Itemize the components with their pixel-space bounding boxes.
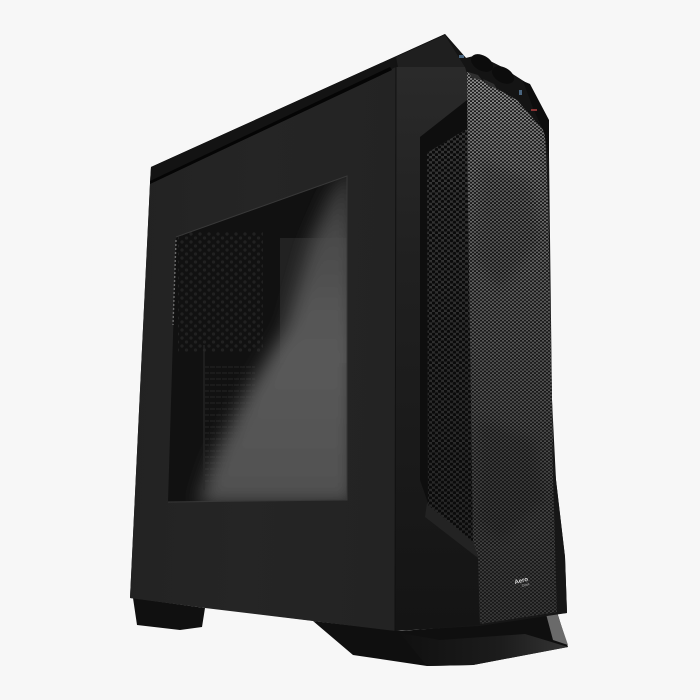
front mesh, shaded section	[427, 127, 473, 542]
window frame lines	[168, 176, 347, 502]
front panel corner trim	[523, 81, 549, 160]
front left strip	[395, 67, 480, 631]
product image: PC tower case	[130, 34, 568, 666]
brand logo: Cool	[521, 582, 530, 588]
interior panel through reflection	[280, 238, 350, 363]
side panel	[130, 67, 396, 631]
interior lighter panel	[280, 238, 307, 328]
rear foot	[133, 598, 205, 630]
top panel	[150, 34, 465, 183]
dark fan shapes behind mesh	[475, 160, 545, 540]
lower chevron	[425, 503, 478, 558]
control knob	[489, 63, 517, 87]
front mesh, main section	[467, 72, 557, 624]
control knob	[468, 51, 496, 75]
blue port	[459, 55, 464, 58]
interior perforation	[178, 232, 263, 352]
front base stand	[313, 612, 568, 666]
blue port	[519, 90, 522, 95]
interior slotted panel	[205, 366, 253, 458]
lower right trim	[552, 440, 567, 614]
brand logo: Aero	[514, 577, 529, 586]
top control panel	[445, 34, 549, 160]
interior sparkle column	[173, 240, 176, 325]
black groove under top panel	[150, 67, 392, 184]
black chevron above mesh	[420, 100, 470, 503]
body silhouette backing	[130, 34, 567, 631]
port recess	[468, 72, 482, 80]
glass window	[168, 170, 355, 505]
window reflection	[198, 170, 355, 505]
port recess	[483, 79, 497, 89]
upper front facet	[396, 35, 465, 67]
interior vertical rail	[203, 345, 205, 490]
red indicator	[531, 109, 537, 111]
